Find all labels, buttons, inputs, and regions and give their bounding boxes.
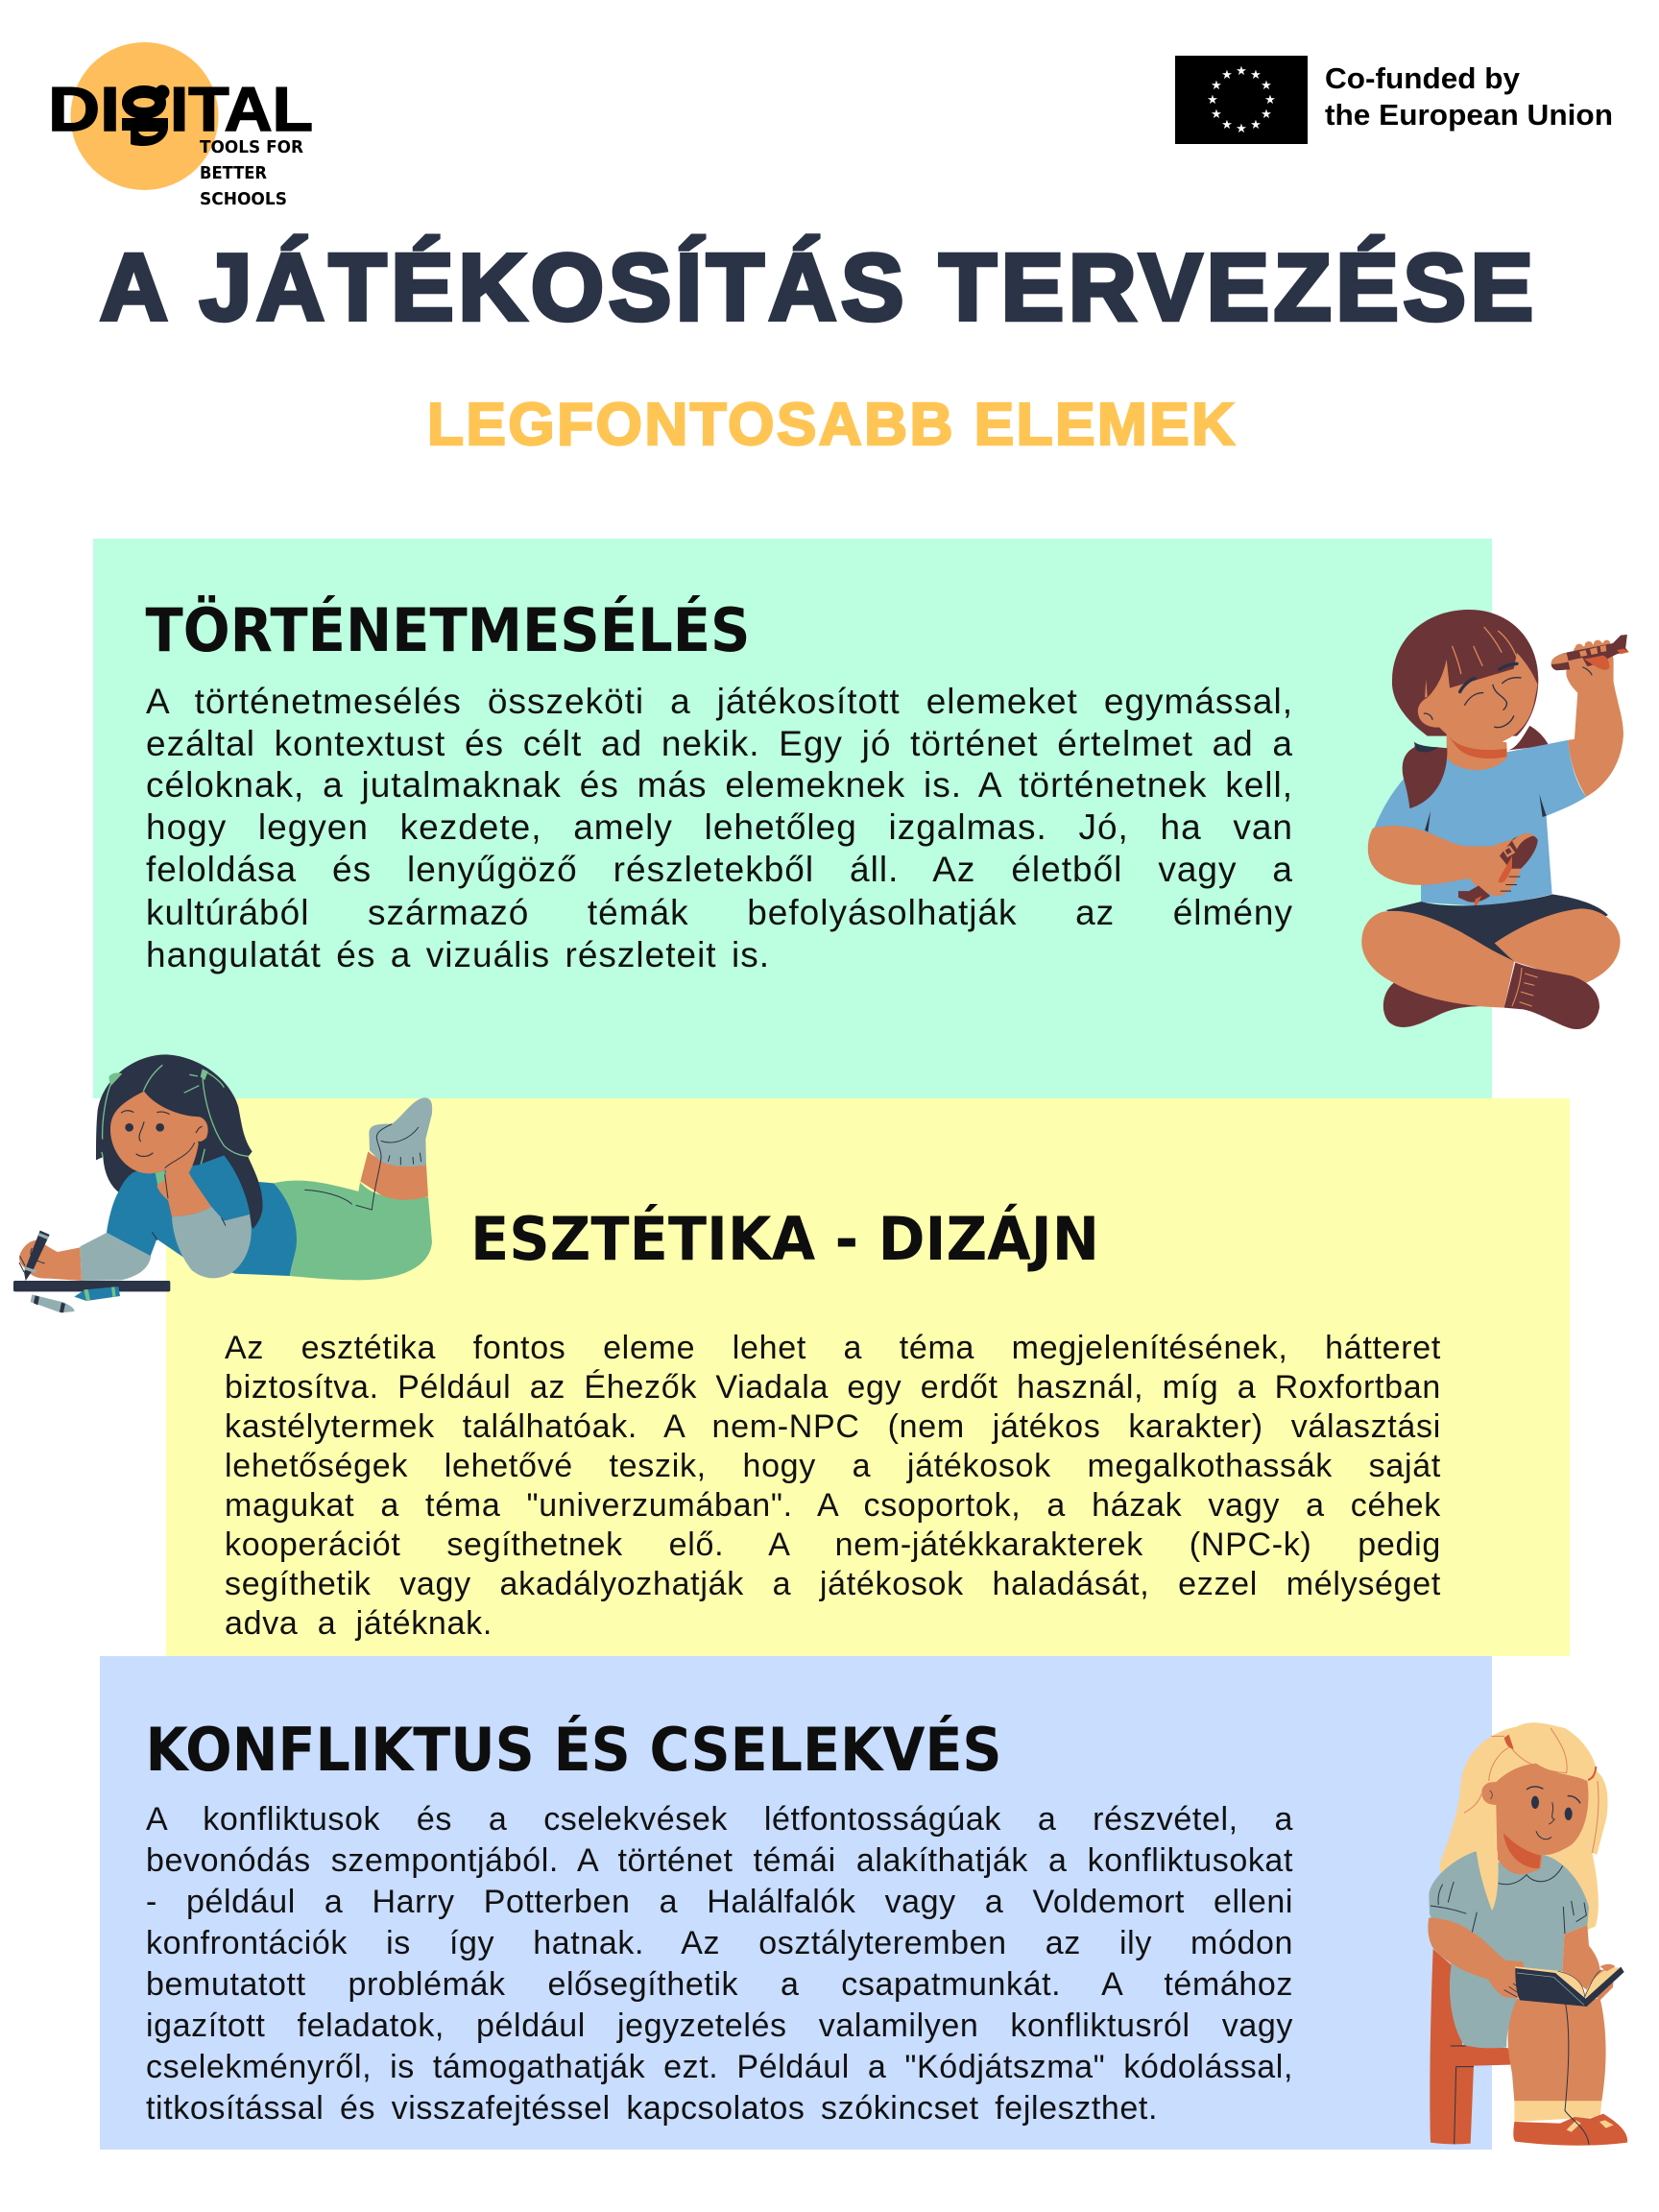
panel: conflict background [100,1656,1492,2150]
back foot [1383,983,1485,1027]
face details [1531,1796,1539,1809]
legs [1508,1999,1606,2101]
gray sleeve [172,1207,252,1278]
lower leg [360,1151,428,1200]
fingers [1600,1964,1615,1971]
hand and forearm [156,1138,211,1216]
text block: conflict: bemutatott problémák elősegíthetik a csapatmunkát. A témához [146,1966,1293,2003]
text block: storytelling: hogy legyen kezdete, amely lehetőleg izgalmas. Jó, ha van [146,807,1293,847]
gray crayon [31,1294,74,1312]
ponytail [1403,746,1447,808]
logo: EU flag: ★ [1207,93,1218,108]
text block: storytelling: feloldása és lenyűgöző részletekből áll. Az életből vagy a [146,850,1293,889]
text block: storytelling: céloknak, a jutalmaknak és más elemeknek is. A történetnek kell, [146,765,1293,805]
text block: conflict [146,1801,1293,2127]
text: co-funded by the European Union: Co-funded by [1325,61,1521,95]
left hand [19,1240,82,1281]
shoes [1513,2114,1627,2146]
logo: Digital Tools for Better Schools [48,42,313,209]
illustration: girl reading on a chair [1428,1722,1628,2146]
right arm [1562,1925,1615,2000]
text block: conflict: - például a Harry Potterben a Halálfalók vagy a Voldemort elleni [146,1884,1293,1920]
text block: storytelling [146,682,1293,974]
face lines [1424,663,1521,728]
logo: Digital Tools for Better Schools: ITAL [170,74,313,144]
blue sleeve [199,1155,251,1221]
text: co-funded by the European Union: the European Union [1325,98,1613,132]
subtitle: LEGFONTOSABB ELEMEK [427,392,1235,458]
fringe highlights [1453,627,1516,674]
text block: aesthetics: biztosítva. Például az Éhezők Viadala egy erdőt használ, míg a Roxfortban [225,1369,1441,1406]
logo: EU flag [1175,56,1308,144]
logo: Digital Tools for Better Schools: BETTER [200,164,267,183]
logo: EU flag: ★ [1236,64,1247,79]
heading: storytelling: TÖRTÉNETMESÉLÉS [146,595,751,665]
dress [1429,1851,1589,2048]
logo: Digital Tools for Better Schools: TOOLS FOR [200,138,303,157]
text block: aesthetics: magukat a téma "univerzumában". A csoportok, a házak vagy a céhek [225,1487,1441,1524]
heading: conflict: KONFLIKTUS ÉS CSELEKVÉS [146,1715,1002,1785]
drawing board [13,1281,170,1291]
text block: storytelling: A történetmesélés összeköti a játékosított elemeket egymással, [146,682,1293,721]
text block: aesthetics: lehetőségek lehetővé teszik, hogy a játékosok megalkothassák saját [225,1448,1441,1484]
panel: aesthetics background [166,1098,1570,1656]
text block: storytelling: ezáltal kontextust és célt ad nekik. Egy jó történet értelmet ad a [146,724,1293,763]
lower arm [1368,826,1525,896]
toy plane top [1551,635,1629,670]
raised arm [1566,641,1623,797]
text block: conflict: A konfliktusok és a cselekvések létfontosságúak a részvétel, a [146,1801,1293,1838]
logo: Digital Tools for Better Schools: DI [48,74,120,144]
blue crayon [74,1286,120,1301]
text block: aesthetics: kooperációt segíthetnek elő. A nem-játékkarakterek (NPC-k) pedig [225,1527,1441,1563]
hair top [1488,1724,1587,1783]
back hair [1392,610,1538,736]
shirt [1375,740,1586,907]
collar [156,1170,165,1189]
text block: conflict: konfrontációk is így hatnak. Az osztályteremben az ily módon [146,1925,1293,1961]
text block: aesthetics [225,1330,1441,1642]
illustration: girl lying and drawing [13,1054,432,1313]
hair lock [1476,1805,1499,1911]
text block: conflict: cselekményről, is támogathatják ezt. Például a "Kódjátszma" kódolással, [146,2049,1293,2085]
crayon in hand [24,1231,50,1281]
shorts [1385,894,1608,961]
neck [1447,733,1507,770]
back leg [1495,908,1621,984]
left arm [1428,1917,1527,1999]
chair [1430,1949,1510,2144]
socks [1514,2101,1601,2122]
shirt body [107,1155,297,1276]
logo: EU flag: ★ [1261,108,1272,122]
pants [274,1181,432,1280]
title: A JÁTÉKOSÍTÁS TERVEZÉSE [100,234,1533,340]
face [110,1092,208,1173]
logo: EU flag: ★ [1211,79,1222,93]
toy plane lower [1500,835,1538,869]
logo: EU flag: ★ [1250,68,1262,83]
logo: EU flag: ★ [1250,118,1262,132]
logo: EU flag: ★ [1236,122,1247,136]
book [1515,1966,1621,1999]
sock [369,1097,432,1166]
logo: Digital Tools for Better Schools: SCHOOLS [200,190,287,209]
hair [96,1054,263,1229]
front foot [1504,962,1599,1029]
text block: aesthetics: segíthetik vagy akadályozhatják a játékosok haladását, ezzel mélységet [225,1566,1441,1602]
text block: storytelling: hangulatát és a vizuális részleteit is. [146,935,770,974]
logo: EU flag: ★ [1211,108,1222,122]
illustration: girl sitting with toy planes [1361,610,1628,1029]
text block: aesthetics: adva a játéknak. [225,1605,493,1642]
face [1418,653,1538,746]
text: co-funded by the European Union [1325,61,1613,132]
logo: EU flag: ★ [1221,118,1233,132]
logo: EU flag: ★ [1261,79,1272,93]
panel: storytelling background [93,539,1492,1098]
text block: aesthetics: kastélytermek találhatóak. A nem-NPC (nem játékos karakter) választási [225,1408,1441,1445]
logo: EU flag: ★ [1221,68,1233,83]
logo: EU flag: ★ [1264,93,1276,108]
text block: aesthetics: Az esztétika fontos eleme lehet a téma megjelenítésének, hátteret [225,1330,1441,1366]
neck and face [1498,1837,1543,1874]
text block: conflict: igazított feladatok, például jegyzetelés valamilyen konfliktusról vagy [146,2008,1293,2044]
hair back [1440,1722,1608,1930]
text block: conflict: titkosítással és visszafejtéssel kapcsolatos szókincset fejleszthet. [146,2090,1158,2127]
text block: conflict: bevonódás szempontjából. A történet témái alakíthatják a konfliktusokat [146,1842,1293,1879]
text block: storytelling: kultúrából származó témák befolyásolhatják az élmény [146,893,1293,932]
left arm sleeve [80,1233,151,1281]
heading: aesthetics: ESZTÉTIKA - DIZÁJN [470,1204,1099,1274]
front leg [1361,911,1514,1008]
